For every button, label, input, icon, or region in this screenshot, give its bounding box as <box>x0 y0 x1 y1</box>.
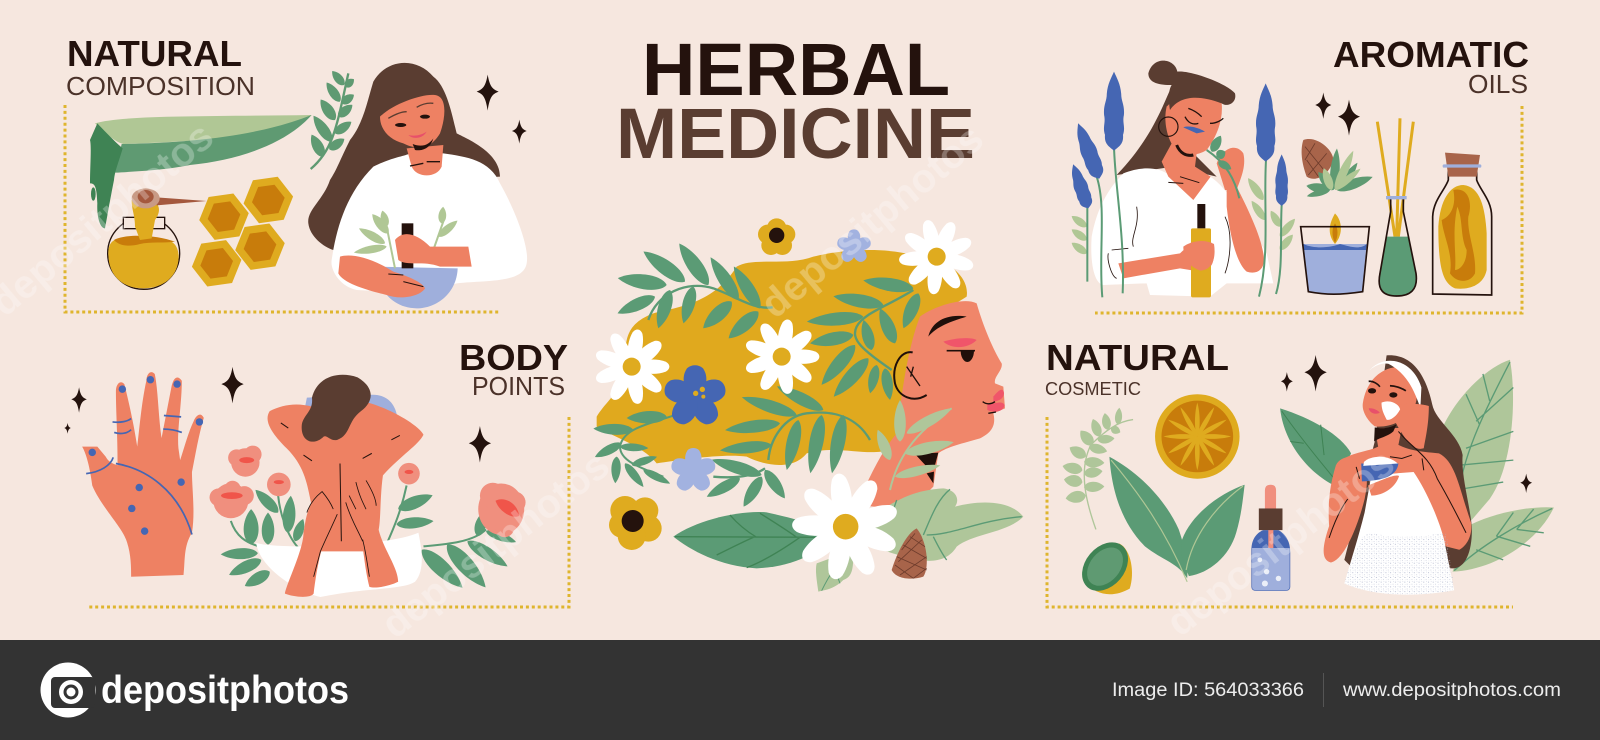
plants: flowers and leaves <box>210 446 526 593</box>
icon: honeycomb <box>189 175 296 288</box>
icon: sparkles <box>1281 355 1532 493</box>
branch: lower center <box>719 381 870 475</box>
icon: lime <box>1073 533 1137 600</box>
flower: yellow top <box>758 218 795 255</box>
logo: depositphotos <box>40 662 349 718</box>
icon: oil bottle <box>1433 153 1492 295</box>
sprig: sage by neck <box>873 400 955 490</box>
flower: light blue upper <box>836 229 872 264</box>
leaf: dark bottom <box>673 512 833 568</box>
icon: dropper bottle <box>1251 485 1290 591</box>
dotted frame <box>1095 106 1522 313</box>
watermarks: depositphotos <box>1158 441 1403 645</box>
branch: left <box>593 410 680 490</box>
face in profile <box>857 301 1005 510</box>
icon: candle <box>1301 213 1369 294</box>
site url: www.depositphotos.com <box>1342 680 1561 701</box>
icon: sparkles <box>1315 93 1360 136</box>
heading: aromatic oils <box>1333 34 1529 99</box>
heading: aromatic oils: AROMATIC <box>1333 34 1529 75</box>
branch: upper right <box>806 274 924 401</box>
flower: daisy bottom <box>775 456 916 597</box>
flower: daisy left <box>594 328 669 405</box>
figure: woman smelling sprig <box>1091 61 1273 297</box>
heading: body points: BODY <box>459 337 568 378</box>
heading: aromatic oils: OILS <box>1468 69 1528 99</box>
dotted frame <box>1047 417 1513 607</box>
dotted frame <box>65 105 500 312</box>
towel <box>256 533 422 597</box>
icon: pine cone and plant <box>1302 139 1374 199</box>
heading: natural cosmetic: COSMETIC <box>1045 379 1141 399</box>
leaf: light small <box>816 550 853 592</box>
panel: aromatic oils <box>1066 34 1529 313</box>
icon: reed diffuser <box>1377 118 1416 296</box>
flower: daisy center <box>744 318 819 395</box>
heading: body points: POINTS <box>472 371 565 401</box>
icon: honey jar with dipper <box>108 188 207 289</box>
logo: depositphotos: depositphotos <box>101 669 349 712</box>
divider <box>1323 673 1324 707</box>
illustration: massage <box>64 367 526 597</box>
heading: natural composition: NATURAL <box>67 33 242 74</box>
title: HERBAL <box>642 28 950 111</box>
icon: fern sprig <box>307 68 356 169</box>
title: MEDICINE <box>616 95 975 174</box>
illustration: aromatherapy <box>1066 61 1492 297</box>
icon: lavender flowers <box>1066 72 1288 211</box>
hair <box>597 250 967 465</box>
icon: aloe leaf <box>90 115 312 228</box>
icon: orange slice <box>1155 394 1240 479</box>
title <box>616 28 975 174</box>
icon: sparkles <box>477 75 527 144</box>
icon: pine cone <box>892 528 927 579</box>
icon: sparkles <box>64 367 491 462</box>
icon: hand with acupressure points <box>82 372 204 577</box>
icon: lavender stems <box>1087 147 1282 297</box>
heading: natural composition: COMPOSITION <box>66 71 255 101</box>
icon: fern <box>1061 407 1133 529</box>
branch: lower mid <box>704 454 790 510</box>
flower: light blue lower <box>669 448 717 494</box>
figure: woman grinding herbs <box>308 63 527 308</box>
dotted frame <box>89 417 569 607</box>
panel: natural composition <box>65 33 527 312</box>
sage leaves behind woman <box>1069 176 1298 257</box>
pillow <box>300 395 398 447</box>
watermarks: depositphotos <box>373 443 618 647</box>
flower: blue <box>662 365 728 429</box>
heading: natural cosmetic: NATURAL <box>1046 337 1229 378</box>
flower: daisy top <box>890 210 983 304</box>
watermarks <box>0 114 1403 647</box>
illustration: cosmetics <box>1061 355 1554 600</box>
panel: center portrait <box>593 210 1023 597</box>
heading: natural cosmetic <box>1045 337 1229 399</box>
leaf: light bottom right <box>857 488 1023 561</box>
flower: yellow bottom <box>609 496 662 550</box>
image id: Image ID: 564033366 <box>1112 680 1304 701</box>
figure: woman back <box>268 375 423 597</box>
panel: natural cosmetic <box>1045 337 1554 607</box>
illustration: herbs and honey <box>90 63 527 308</box>
watermarks: depositphotos <box>753 116 992 327</box>
panel: body points <box>64 337 569 607</box>
figure: woman applying cream <box>1324 355 1472 595</box>
heading: body points <box>459 337 568 401</box>
leaves behind woman <box>1280 360 1554 572</box>
icon: mint leaves <box>1109 457 1245 582</box>
footer bar <box>0 640 1600 740</box>
branch: upper left <box>615 239 773 344</box>
heading: natural composition <box>66 33 255 101</box>
